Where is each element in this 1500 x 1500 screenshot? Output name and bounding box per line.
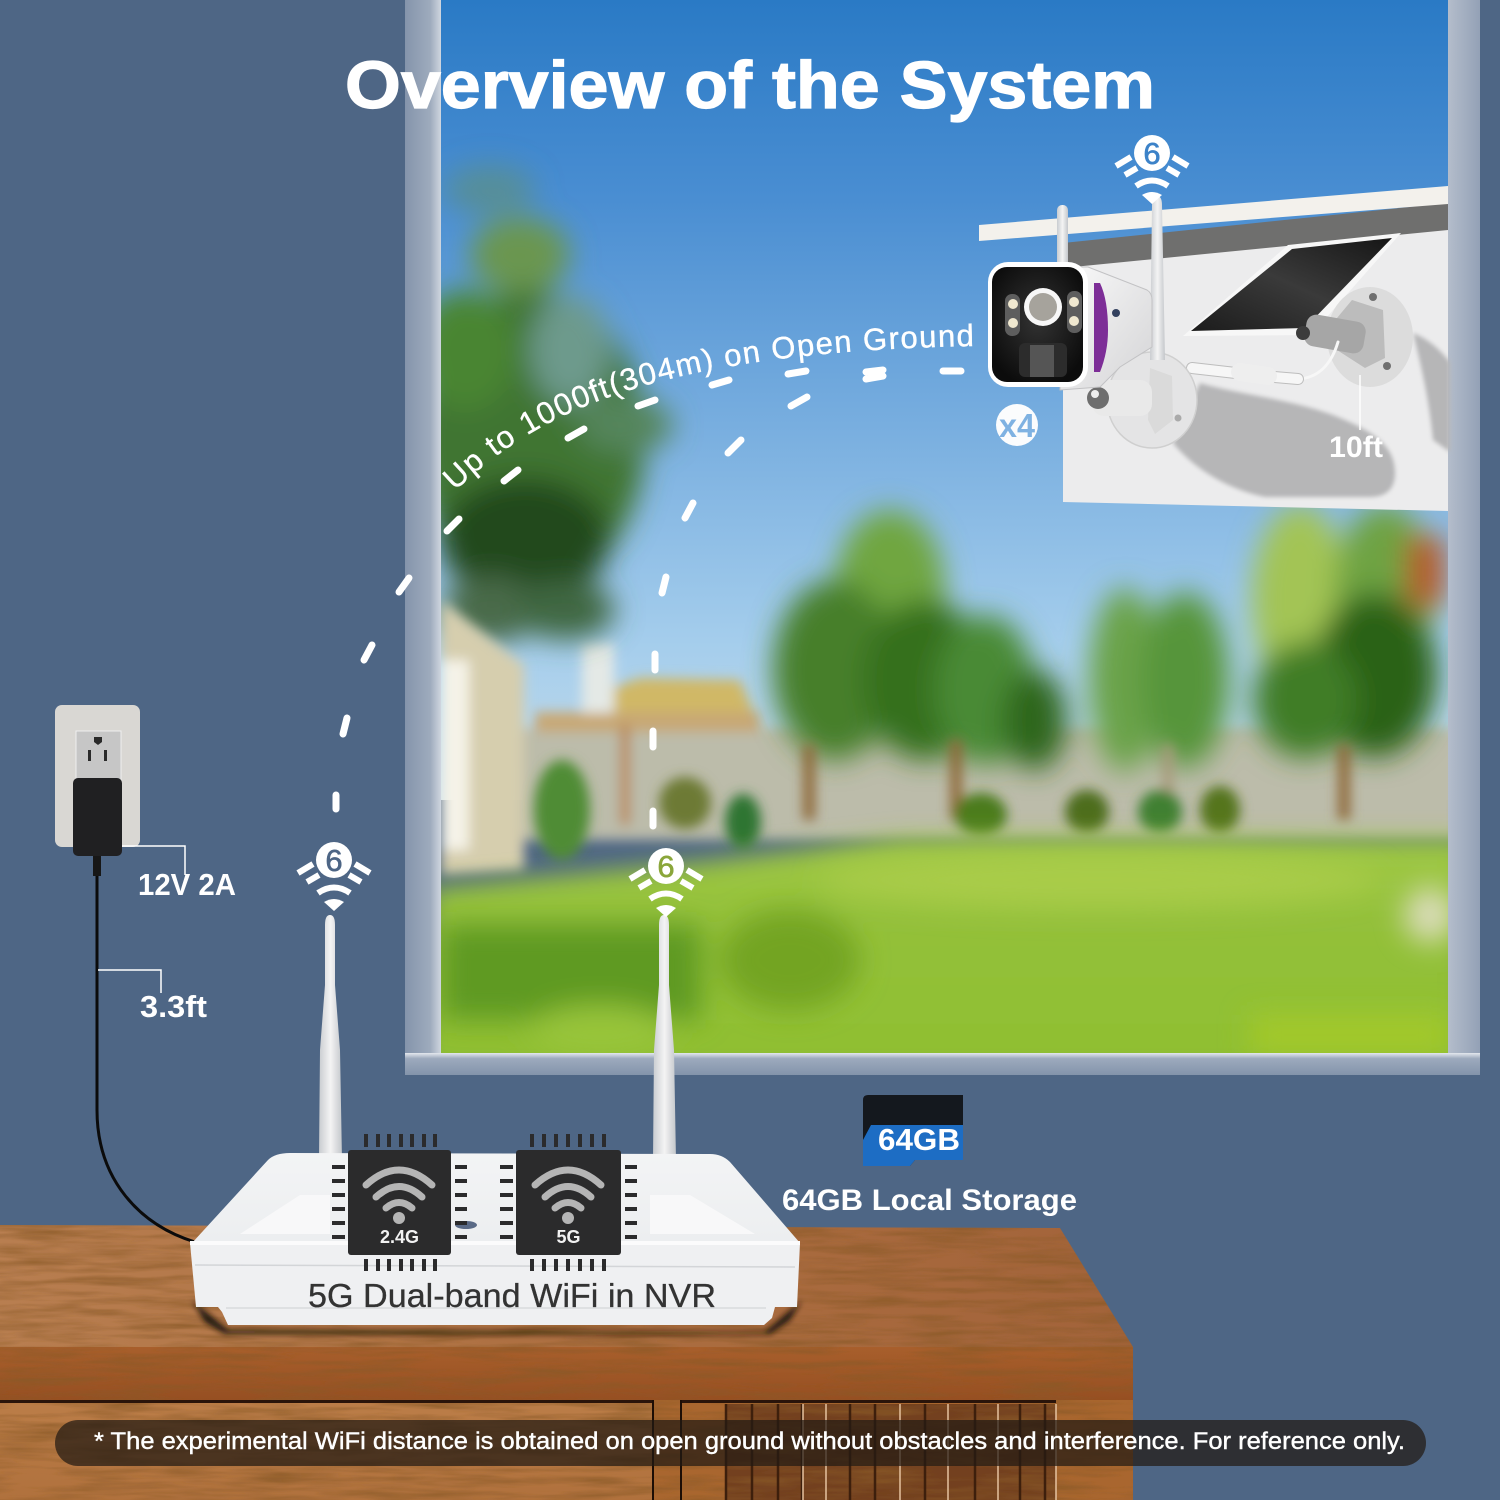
wall outlet and power adapter xyxy=(55,705,140,876)
icon: wifi 6 camera: 6 xyxy=(1143,136,1161,171)
NVR shadow xyxy=(192,1300,802,1334)
dashed signal path: right antenna to camera xyxy=(653,376,883,826)
label: 3.3ft xyxy=(98,970,207,1024)
label: 12V 2A: 12V 2A xyxy=(138,867,236,902)
upper left tree xyxy=(415,165,673,644)
icon: 64GB memory card xyxy=(863,1095,963,1166)
disclaimer pill: * The experimental WiFi distance is obtained on open ground without obstacles and interference. For reference only. xyxy=(94,1428,1405,1455)
connecting cable xyxy=(1192,342,1338,379)
NVR antennas xyxy=(319,915,676,1160)
icon: wifi 6 left antenna: 6 xyxy=(325,843,343,878)
table xyxy=(0,1225,1133,1500)
label: 10ft cable xyxy=(1329,375,1383,464)
label: quantity x4: x4 xyxy=(999,407,1036,444)
chip: 2.4G WiFi: 2.4G xyxy=(380,1227,419,1247)
house wall xyxy=(441,600,524,875)
distant fence xyxy=(510,643,1460,840)
cast shadow on wall xyxy=(1173,333,1450,497)
camera mount xyxy=(1087,352,1197,448)
chip: 5G WiFi: 5G xyxy=(556,1227,581,1247)
NVR label text: 5G Dual-band WiFi in NVR xyxy=(308,1277,716,1314)
solar bracket xyxy=(1296,287,1413,387)
trunks and bushes xyxy=(534,740,1350,860)
curved range label: Up to 1000ft(304m) on Open Ground xyxy=(442,323,972,487)
wood grain xyxy=(0,1225,1133,1500)
icon: wifi 6 left antenna xyxy=(298,842,370,911)
solar panel xyxy=(1183,233,1401,336)
window view: blurred garden xyxy=(415,0,1470,1075)
chip: 2.4G WiFi xyxy=(332,1134,467,1271)
NVR recorder xyxy=(190,1153,800,1325)
lawn xyxy=(420,838,1470,1075)
icon: wifi 6 right antenna: 6 xyxy=(657,849,675,884)
icon: wifi 6 camera xyxy=(1116,135,1188,204)
label: 12V 2A xyxy=(122,846,236,902)
camera xyxy=(988,262,1152,390)
label: 10ft cable: 10ft xyxy=(1329,431,1383,464)
chip: 5G WiFi xyxy=(500,1134,637,1271)
window frame xyxy=(405,0,1480,1075)
disclaimer pill xyxy=(55,1420,1426,1466)
camera antennas xyxy=(1057,196,1165,360)
garden trees xyxy=(773,505,1445,772)
icon: 64GB memory card: 64GB xyxy=(878,1122,960,1157)
dashed signal path: left antenna to camera xyxy=(336,370,961,809)
title: Overview of the System xyxy=(345,48,1155,123)
label: 3.3ft: 3.3ft xyxy=(140,989,207,1024)
icon: wifi 6 right antenna xyxy=(630,848,702,917)
power cable xyxy=(97,856,195,1242)
label: local storage: 64GB Local Storage xyxy=(782,1184,1077,1217)
wall mount background: eave and wall behind camera xyxy=(979,186,1450,511)
